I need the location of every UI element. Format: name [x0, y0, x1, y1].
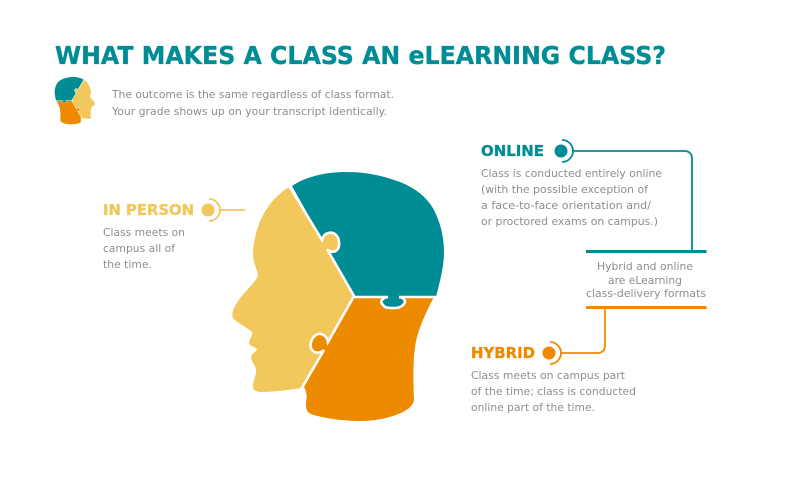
subtitle text: The outcome is the same regardless of class format. [111, 88, 394, 101]
text: hybrid description: Class meets on campus part [471, 369, 625, 382]
orange bar [586, 306, 706, 309]
text: online description [481, 167, 662, 228]
icon: online marker and connector [554, 140, 692, 250]
heading: in person: IN PERSON [103, 201, 194, 219]
text: formats note: Hybrid and online [597, 260, 693, 273]
subtitle text [111, 88, 394, 118]
illustration: puzzle head [232, 172, 444, 421]
text: online description: (with the possible exception of [481, 183, 648, 196]
icon: small puzzle head [55, 77, 95, 124]
text: hybrid description [471, 369, 636, 414]
text: online description: a face-to-face orientation and/ [481, 199, 651, 212]
panel: shared formats note [586, 250, 706, 309]
text: formats note [586, 260, 706, 300]
heading: hybrid: HYBRID [471, 344, 535, 362]
teal bar [586, 250, 706, 253]
text: online description: or proctored exams on campus.) [481, 215, 658, 228]
icon: in person marker and connector [202, 199, 245, 221]
text: hybrid description: online part of the time. [471, 401, 595, 414]
text: formats note: are eLearning [608, 274, 682, 287]
text: in person description: campus all of [103, 242, 175, 255]
panel: in person [103, 199, 245, 271]
panel: hybrid [471, 308, 636, 414]
text: in person description: the time. [103, 258, 152, 271]
title: WHAT MAKES A CLASS AN eLEARNING CLASS? [55, 41, 666, 70]
text: formats note: class-delivery formats [586, 287, 706, 300]
text: in person description: Class meets on [103, 226, 185, 239]
panel: online [481, 140, 692, 250]
text: in person description [103, 226, 185, 271]
subtitle text: Your grade shows up on your transcript identically. [111, 105, 387, 118]
text: hybrid description: of the time; class is conducted [471, 385, 636, 398]
heading: online: ONLINE [481, 142, 544, 160]
text: online description: Class is conducted entirely online [481, 167, 662, 180]
icon: hybrid marker and connector [542, 308, 605, 364]
